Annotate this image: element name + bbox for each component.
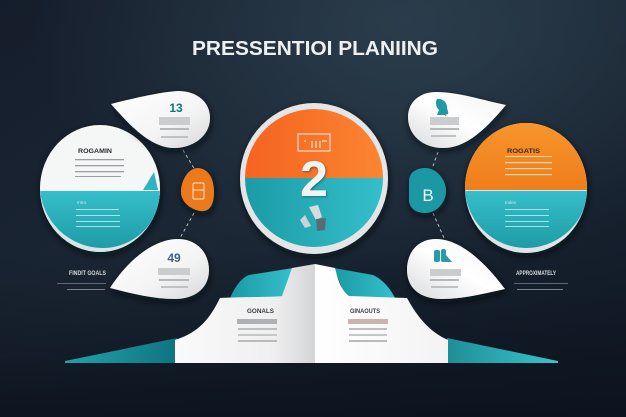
centre ring xyxy=(240,103,388,254)
left circle upper text lines xyxy=(75,159,124,177)
right teal tab xyxy=(334,268,395,298)
caption: lower left: FINDIT GOALS xyxy=(69,270,107,277)
big number 2: 2 xyxy=(300,151,328,207)
right circle body xyxy=(464,120,590,253)
panel: left circle xyxy=(38,125,162,253)
callout text xyxy=(430,269,461,288)
left circle lower text: Intro xyxy=(77,200,87,205)
caption: lower right: APPROXIMATELY xyxy=(516,270,556,277)
icon: folded pieces xyxy=(300,205,326,231)
centre split disc xyxy=(245,109,383,247)
right circle heading: ROGATIS xyxy=(507,148,541,155)
callout text xyxy=(158,268,190,288)
callout number: 13 xyxy=(169,101,183,115)
callout: top right xyxy=(408,92,506,148)
callout: top left xyxy=(111,91,210,148)
panel: right circle xyxy=(464,120,590,253)
right teal wing xyxy=(447,338,558,363)
left circle heading: ROGAMIN xyxy=(78,148,112,155)
panel: centre circle xyxy=(240,103,388,254)
right page text: GINAOUTS xyxy=(350,309,380,315)
left teal tab xyxy=(230,268,293,298)
right circle upper text lines xyxy=(505,156,552,175)
badge: orange xyxy=(181,168,214,211)
caption: lower left xyxy=(57,270,107,290)
callout text xyxy=(159,117,190,138)
icon: presentation board xyxy=(298,134,330,151)
icon: teal profile xyxy=(436,99,448,116)
left teal wing xyxy=(65,338,177,363)
caption: lower right xyxy=(514,270,568,290)
title: PRESSENTIOI PLANIING xyxy=(192,38,438,60)
right circle lower text: Index xyxy=(505,200,517,205)
left page text xyxy=(237,309,277,342)
icon: orange badge glyph xyxy=(193,183,204,199)
panel: bottom pedestal xyxy=(65,264,558,363)
right page text xyxy=(348,309,388,342)
badge letter B: B xyxy=(422,186,434,205)
connector: left dashed lines xyxy=(180,150,195,238)
callout text xyxy=(430,117,459,137)
icon: teal pieces xyxy=(434,249,452,262)
left circle body xyxy=(38,125,162,253)
badge: teal xyxy=(409,168,446,213)
left page text: GONALS xyxy=(247,309,274,315)
right white page xyxy=(315,264,448,363)
connector: right dashed lines xyxy=(433,152,444,238)
left white page xyxy=(175,264,315,363)
callout: bottom right xyxy=(407,239,505,299)
callout number: 49 xyxy=(167,251,181,265)
callout: bottom left xyxy=(110,239,209,299)
